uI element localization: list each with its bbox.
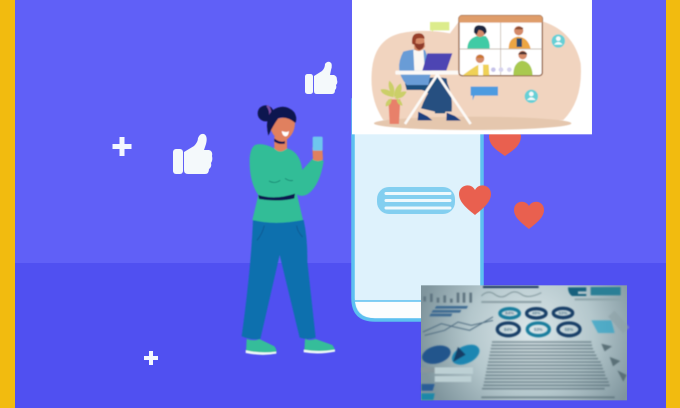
photo: video conference illustration xyxy=(352,0,592,134)
peach blob xyxy=(371,20,581,120)
left shoe xyxy=(246,339,277,355)
top right tiles xyxy=(568,287,586,296)
thumbs up icon small xyxy=(305,62,337,94)
user badge top xyxy=(552,34,565,48)
pie charts xyxy=(420,342,453,367)
face xyxy=(270,116,295,141)
donut charts xyxy=(497,308,580,336)
hand xyxy=(312,146,323,161)
user badge bottom xyxy=(525,90,538,103)
line chart xyxy=(423,317,493,335)
bar pattern xyxy=(591,320,615,333)
man with laptop xyxy=(399,33,461,121)
neck xyxy=(274,137,287,156)
chat bubble xyxy=(377,187,455,214)
ground shadow xyxy=(374,117,571,130)
hair bun xyxy=(258,105,274,121)
donut values: 53% xyxy=(559,310,567,315)
right shoe xyxy=(304,339,335,353)
participant yellow xyxy=(463,65,489,75)
background wall xyxy=(0,0,680,263)
background floor xyxy=(0,263,680,408)
call control dots xyxy=(491,67,496,72)
phone screen xyxy=(353,100,482,320)
left yellow bar xyxy=(0,0,15,408)
sweater xyxy=(250,144,324,223)
belt xyxy=(258,194,295,201)
plus icon small xyxy=(144,351,158,365)
donut values: 64% xyxy=(505,311,514,316)
phone bottom bezel xyxy=(355,301,480,318)
hair xyxy=(267,107,296,136)
heart middle xyxy=(459,185,491,215)
laptop xyxy=(422,53,452,71)
photo background xyxy=(352,0,592,134)
donut values: 84% xyxy=(504,327,513,332)
body text xyxy=(481,342,615,397)
green chat note xyxy=(430,22,449,32)
participant green xyxy=(467,36,490,49)
video call window xyxy=(459,16,542,76)
phone xyxy=(353,100,482,320)
plus icon large xyxy=(112,137,132,156)
desk xyxy=(395,71,471,124)
donut values xyxy=(504,310,573,332)
left horizontal bars xyxy=(421,367,435,373)
donut values: 53% xyxy=(534,327,543,332)
right yellow bar xyxy=(666,0,680,408)
report background xyxy=(421,285,627,400)
top bar charts xyxy=(425,293,471,303)
participant orange xyxy=(509,37,531,49)
chat bubble lines xyxy=(386,194,450,208)
triangles xyxy=(601,344,627,382)
plant xyxy=(381,81,407,124)
photo: printed charts report xyxy=(420,285,627,400)
participant lime xyxy=(513,61,533,75)
woman figure xyxy=(242,105,335,355)
top line chart xyxy=(483,284,539,290)
blue chat note xyxy=(471,87,498,100)
trousers xyxy=(242,220,316,339)
held phone xyxy=(313,137,323,151)
heart right xyxy=(514,202,544,229)
donut values: 48% xyxy=(532,311,541,316)
donut values: 58% xyxy=(565,327,573,332)
heart top xyxy=(489,130,521,156)
thumbs up icon large xyxy=(173,134,212,174)
